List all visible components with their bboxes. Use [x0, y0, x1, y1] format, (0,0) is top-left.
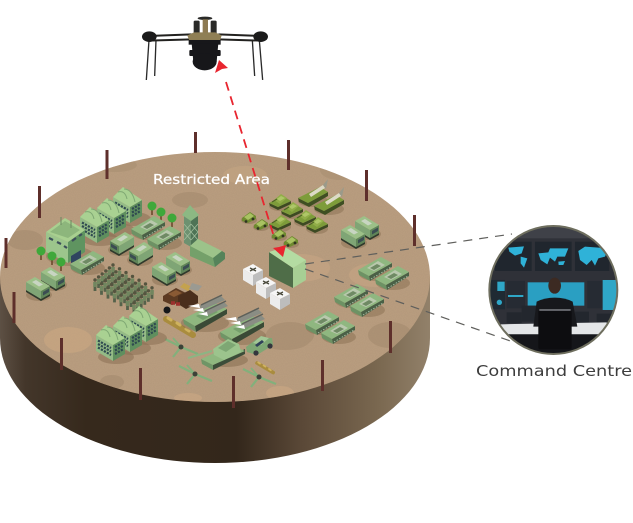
label: command centre: Command Centre [476, 362, 632, 380]
drone gimbal camera [189, 40, 221, 70]
command centre photo [487, 225, 620, 358]
arrowhead at command building [273, 245, 286, 257]
upper-left building row [80, 187, 151, 246]
fence posts [4, 132, 416, 408]
armoured jeep [246, 336, 273, 356]
watch tower [182, 205, 199, 247]
howitzers [165, 338, 276, 387]
right trucks [341, 216, 381, 249]
self-propelled gun [188, 339, 248, 370]
ground patches [7, 158, 412, 403]
arrowhead at drone [215, 60, 228, 73]
drone antenna batteries [194, 17, 217, 34]
drone arms [148, 34, 262, 41]
dashed link: drone to command centre [215, 60, 286, 257]
operator [533, 278, 577, 349]
room wall [491, 238, 616, 334]
drone rotors [142, 31, 268, 42]
drone landing legs [146, 40, 263, 80]
right tank pairs [305, 257, 410, 344]
lower-left building group [96, 306, 167, 364]
army tent [190, 239, 225, 267]
island platform [0, 152, 430, 463]
drone [142, 17, 268, 80]
SAM launcher tanks [181, 295, 266, 345]
platform ground surface [0, 152, 430, 402]
ground grain texture [0, 152, 430, 402]
platform side wall [0, 277, 430, 463]
left vehicles [26, 216, 192, 301]
dashed connector lines to command centre [305, 234, 516, 343]
olive armour group [241, 179, 344, 248]
white bunkers [243, 264, 290, 310]
wrecked vehicles and supplies [163, 283, 202, 314]
middle wall panels [490, 280, 618, 310]
drone tan body [187, 19, 222, 41]
desk [499, 322, 610, 334]
troop formation [93, 263, 154, 314]
sandbags [166, 318, 273, 373]
label: restricted area: Restricted Area [153, 173, 270, 188]
command centre building [269, 247, 306, 288]
trees [36, 202, 176, 271]
top wall screens [495, 242, 609, 271]
photo frame [489, 226, 617, 354]
headquarters building [46, 217, 94, 266]
lower monitors [507, 306, 613, 324]
